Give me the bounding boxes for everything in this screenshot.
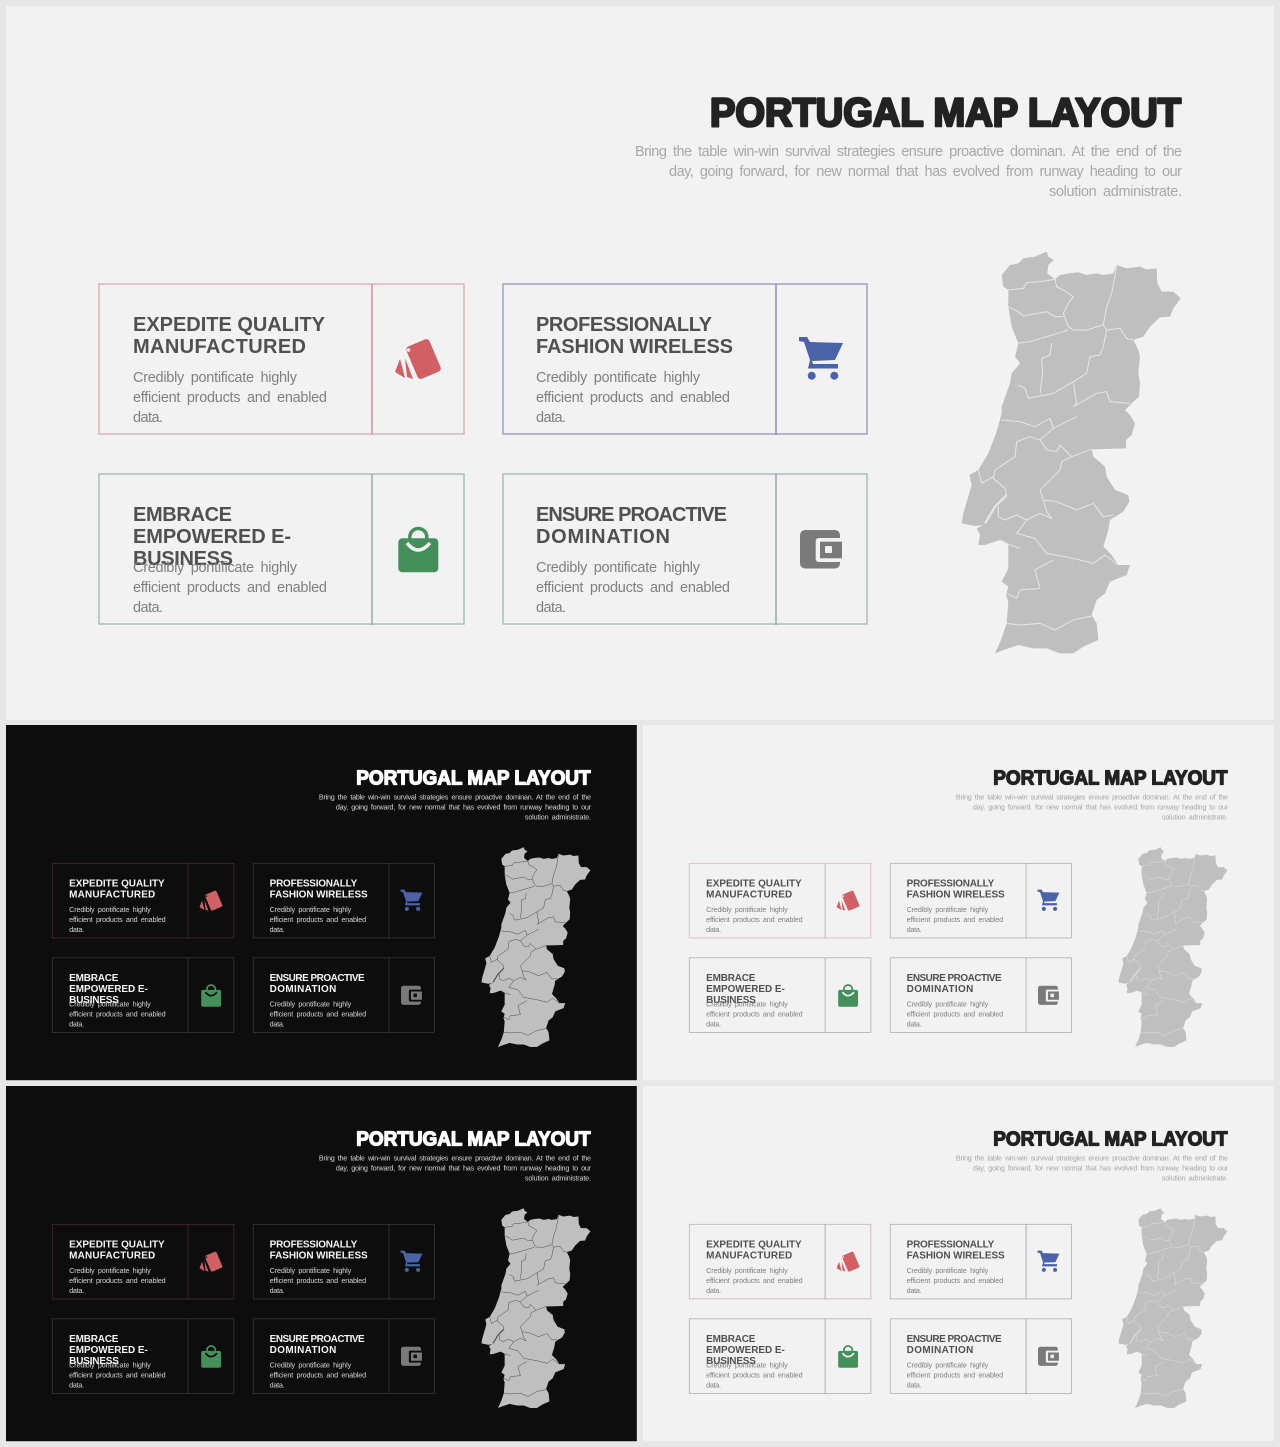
card: ensure proactive: Credibly pontificate highly [536, 560, 701, 576]
subtitle text: Bring the table win-win survival strategies ensure proactive dominan. At the end of the [956, 793, 1228, 802]
card: embrace empowered: EMPOWERED E- [133, 526, 291, 548]
subtitle text: Bring the table win-win survival strategies ensure proactive dominan. At the end of the [956, 1154, 1228, 1163]
slide background [6, 725, 637, 1080]
card: embrace empowered: EMBRACE [706, 1334, 756, 1345]
card: embrace empowered: Credibly pontificate highly [133, 560, 298, 576]
card: embrace empowered: data. [133, 600, 163, 616]
card: embrace empowered [52, 958, 234, 1033]
card: ensure proactive: ENSURE PROACTIVE [536, 504, 727, 526]
card: expedite quality: MANUFACTURED [706, 1251, 792, 1262]
card: ensure proactive [253, 1319, 434, 1394]
card: embrace empowered: data. [706, 1019, 721, 1028]
card: expedite quality: EXPEDITE QUALITY [69, 1240, 165, 1251]
subtitle text [956, 793, 1229, 822]
subtitle text: Bring the table win-win survival strategies ensure proactive dominan. At the end of the [319, 1154, 591, 1163]
title: PORTUGAL MAP LAYOUT [356, 1129, 591, 1151]
subtitle text: solution administrate. [1049, 184, 1182, 200]
subtitle text [956, 1154, 1229, 1183]
card: embrace empowered [99, 474, 464, 625]
card: professionally fashion: FASHION WIRELESS [907, 890, 1005, 901]
subtitle text: solution administrate. [1162, 813, 1228, 822]
map: Portugal [962, 252, 1181, 653]
card: ensure proactive: data. [270, 1380, 285, 1389]
card: expedite quality [99, 284, 464, 435]
card: professionally fashion: FASHION WIRELESS [907, 1251, 1005, 1262]
subtitle text: day, going forward, for new normal that has evolved from runway heading to our [973, 803, 1229, 812]
card: embrace empowered: EMPOWERED E- [69, 984, 148, 995]
slide background [643, 725, 1274, 1080]
card: embrace empowered: efficient products and enabled [706, 1010, 803, 1019]
card: ensure proactive: ENSURE PROACTIVE [270, 973, 365, 984]
card: professionally fashion: Credibly pontificate highly [536, 370, 701, 386]
card: professionally fashion [253, 1224, 434, 1299]
card: professionally fashion [253, 863, 434, 938]
subtitle text: day, going forward, for new normal that has evolved from runway heading to our [336, 803, 592, 812]
subtitle text: day, going forward, for new normal that has evolved from runway heading to our [973, 1164, 1229, 1173]
subtitle text: Bring the table win-win survival strategies ensure proactive dominan. At the end of the [319, 793, 591, 802]
panel: light slide lower [643, 1086, 1274, 1441]
subtitle text: solution administrate. [1162, 1174, 1228, 1183]
card: professionally fashion: efficient products and enabled [907, 915, 1003, 924]
card: expedite quality: data. [133, 410, 163, 426]
card: ensure proactive [890, 958, 1071, 1033]
card: professionally fashion: efficient products and enabled [270, 915, 366, 924]
card: expedite quality: EXPEDITE QUALITY [706, 1240, 802, 1251]
subtitle text [319, 1154, 592, 1183]
card: ensure proactive: efficient products and enabled [270, 1371, 366, 1380]
title: PORTUGAL MAP LAYOUT [993, 768, 1228, 790]
card: expedite quality [52, 863, 234, 938]
card: expedite quality: efficient products and enabled [706, 915, 803, 924]
card: expedite quality: efficient products and enabled [69, 915, 166, 924]
card: expedite quality: Credibly pontificate highly [133, 370, 298, 386]
card: expedite quality: data. [706, 1286, 721, 1295]
card: embrace empowered: EMPOWERED E- [706, 984, 785, 995]
card: expedite quality: efficient products and enabled [69, 1276, 166, 1285]
slide background [6, 1086, 637, 1441]
card: embrace empowered: EMBRACE [706, 973, 756, 984]
card: ensure proactive: DOMINATION [907, 984, 973, 995]
panel: dark slide upper [6, 725, 637, 1080]
card: embrace empowered: efficient products and enabled [133, 580, 327, 596]
card: professionally fashion: PROFESSIONALLY [536, 314, 713, 336]
card: embrace empowered: EMPOWERED E- [706, 1345, 785, 1356]
card: professionally fashion: efficient products and enabled [907, 1276, 1003, 1285]
card: expedite quality: Credibly pontificate highly [706, 1266, 788, 1275]
card: expedite quality [52, 1224, 234, 1299]
card: ensure proactive: Credibly pontificate highly [270, 1361, 352, 1370]
card: embrace empowered: data. [706, 1380, 721, 1389]
subtitle text [635, 144, 1182, 200]
card: ensure proactive: DOMINATION [270, 984, 336, 995]
card: professionally fashion: data. [536, 410, 566, 426]
card: embrace empowered: data. [69, 1019, 84, 1028]
card: embrace empowered: BUSINESS [706, 995, 756, 1006]
card: embrace empowered: efficient products and enabled [706, 1371, 803, 1380]
slide background [6, 6, 1274, 720]
card: embrace empowered [689, 1319, 871, 1394]
card: ensure proactive: DOMINATION [907, 1345, 973, 1356]
card: embrace empowered: Credibly pontificate highly [69, 1000, 151, 1009]
card: professionally fashion: Credibly pontificate highly [907, 1266, 989, 1275]
card: embrace empowered: EMBRACE [133, 504, 232, 526]
card: expedite quality: EXPEDITE QUALITY [69, 879, 165, 890]
card: expedite quality [689, 1224, 871, 1299]
title: PORTUGAL MAP LAYOUT [356, 768, 591, 790]
card: embrace empowered: BUSINESS [69, 995, 119, 1006]
card: embrace empowered: BUSINESS [133, 548, 233, 570]
subtitle text: solution administrate. [525, 1174, 591, 1183]
card: professionally fashion: data. [907, 925, 922, 934]
panel: light slide upper [643, 725, 1274, 1080]
card: professionally fashion: Credibly pontificate highly [270, 1266, 352, 1275]
card: professionally fashion [503, 284, 867, 435]
card: ensure proactive: efficient products and enabled [270, 1010, 366, 1019]
card: expedite quality: efficient products and enabled [706, 1276, 803, 1285]
card: embrace empowered: EMBRACE [69, 1334, 119, 1345]
card: embrace empowered: EMPOWERED E- [69, 1345, 148, 1356]
card: professionally fashion [890, 863, 1071, 938]
card: embrace empowered: efficient products and enabled [69, 1010, 166, 1019]
card: ensure proactive: Credibly pontificate highly [270, 1000, 352, 1009]
card: expedite quality: Credibly pontificate highly [69, 905, 151, 914]
card: embrace empowered: Credibly pontificate highly [706, 1000, 788, 1009]
card: ensure proactive: ENSURE PROACTIVE [907, 973, 1002, 984]
card: ensure proactive: ENSURE PROACTIVE [270, 1334, 365, 1345]
map: Portugal [481, 847, 590, 1047]
card: professionally fashion: FASHION WIRELESS [270, 1251, 368, 1262]
card: embrace empowered [689, 958, 871, 1033]
card: professionally fashion: FASHION WIRELESS [536, 336, 733, 358]
title: PORTUGAL MAP LAYOUT [710, 91, 1181, 135]
subtitle text: solution administrate. [525, 813, 591, 822]
card: ensure proactive: data. [270, 1019, 285, 1028]
card: professionally fashion: PROFESSIONALLY [907, 1240, 995, 1251]
card: professionally fashion: data. [270, 1286, 285, 1295]
card: embrace empowered: Credibly pontificate highly [706, 1361, 788, 1370]
card: professionally fashion: data. [907, 1286, 922, 1295]
subtitle text: Bring the table win-win survival strategies ensure proactive dominan. At the end of the [635, 144, 1182, 160]
card: professionally fashion: PROFESSIONALLY [907, 879, 995, 890]
card: professionally fashion: Credibly pontificate highly [270, 905, 352, 914]
card: professionally fashion: PROFESSIONALLY [270, 879, 358, 890]
card: professionally fashion [890, 1224, 1071, 1299]
card: embrace empowered: efficient products and enabled [69, 1371, 166, 1380]
card: expedite quality: MANUFACTURED [69, 1251, 155, 1262]
card: ensure proactive: efficient products and enabled [907, 1010, 1003, 1019]
card: professionally fashion: efficient products and enabled [270, 1276, 366, 1285]
card: ensure proactive [503, 474, 867, 625]
card: ensure proactive: Credibly pontificate highly [907, 1361, 989, 1370]
card: ensure proactive: DOMINATION [270, 1345, 336, 1356]
card: embrace empowered: Credibly pontificate highly [69, 1361, 151, 1370]
card: ensure proactive: data. [907, 1380, 922, 1389]
card: expedite quality: data. [69, 1286, 84, 1295]
card: expedite quality: MANUFACTURED [69, 890, 155, 901]
title: PORTUGAL MAP LAYOUT [993, 1129, 1228, 1151]
card: embrace empowered: EMBRACE [69, 973, 119, 984]
card: ensure proactive: ENSURE PROACTIVE [907, 1334, 1002, 1345]
card: embrace empowered [52, 1319, 234, 1394]
card: ensure proactive: efficient products and enabled [536, 580, 730, 596]
card: ensure proactive: data. [907, 1019, 922, 1028]
card: ensure proactive: Credibly pontificate highly [907, 1000, 989, 1009]
card: professionally fashion: Credibly pontificate highly [907, 905, 989, 914]
card: professionally fashion: efficient products and enabled [536, 390, 730, 406]
card: ensure proactive: efficient products and enabled [907, 1371, 1003, 1380]
panel: dark slide lower [6, 1086, 637, 1441]
map: Portugal [1118, 1208, 1227, 1408]
card: embrace empowered: BUSINESS [706, 1356, 756, 1367]
card: professionally fashion: FASHION WIRELESS [270, 890, 368, 901]
panel: large light slide [6, 6, 1274, 720]
slide background [643, 1086, 1274, 1441]
subtitle text: day, going forward, for new normal that has evolved from runway heading to our [336, 1164, 592, 1173]
card: ensure proactive [890, 1319, 1071, 1394]
subtitle text [319, 793, 592, 822]
card: expedite quality: MANUFACTURED [133, 336, 306, 358]
card: expedite quality: data. [69, 925, 84, 934]
card: expedite quality: EXPEDITE QUALITY [706, 879, 802, 890]
map: Portugal [481, 1208, 590, 1408]
card: embrace empowered: BUSINESS [69, 1356, 119, 1367]
card: expedite quality: efficient products and enabled [133, 390, 327, 406]
subtitle text: day, going forward, for new normal that has evolved from runway heading to our [669, 164, 1182, 180]
card: ensure proactive [253, 958, 434, 1033]
card: expedite quality: EXPEDITE QUALITY [133, 314, 326, 336]
card: expedite quality: data. [706, 925, 721, 934]
card: ensure proactive: data. [536, 600, 566, 616]
card: expedite quality: Credibly pontificate highly [69, 1266, 151, 1275]
card: expedite quality: MANUFACTURED [706, 890, 792, 901]
map: Portugal [1118, 847, 1227, 1047]
card: expedite quality: Credibly pontificate highly [706, 905, 788, 914]
card: expedite quality [689, 863, 871, 938]
card: professionally fashion: PROFESSIONALLY [270, 1240, 358, 1251]
card: embrace empowered: data. [69, 1380, 84, 1389]
card: ensure proactive: DOMINATION [536, 526, 670, 548]
card: professionally fashion: data. [270, 925, 285, 934]
